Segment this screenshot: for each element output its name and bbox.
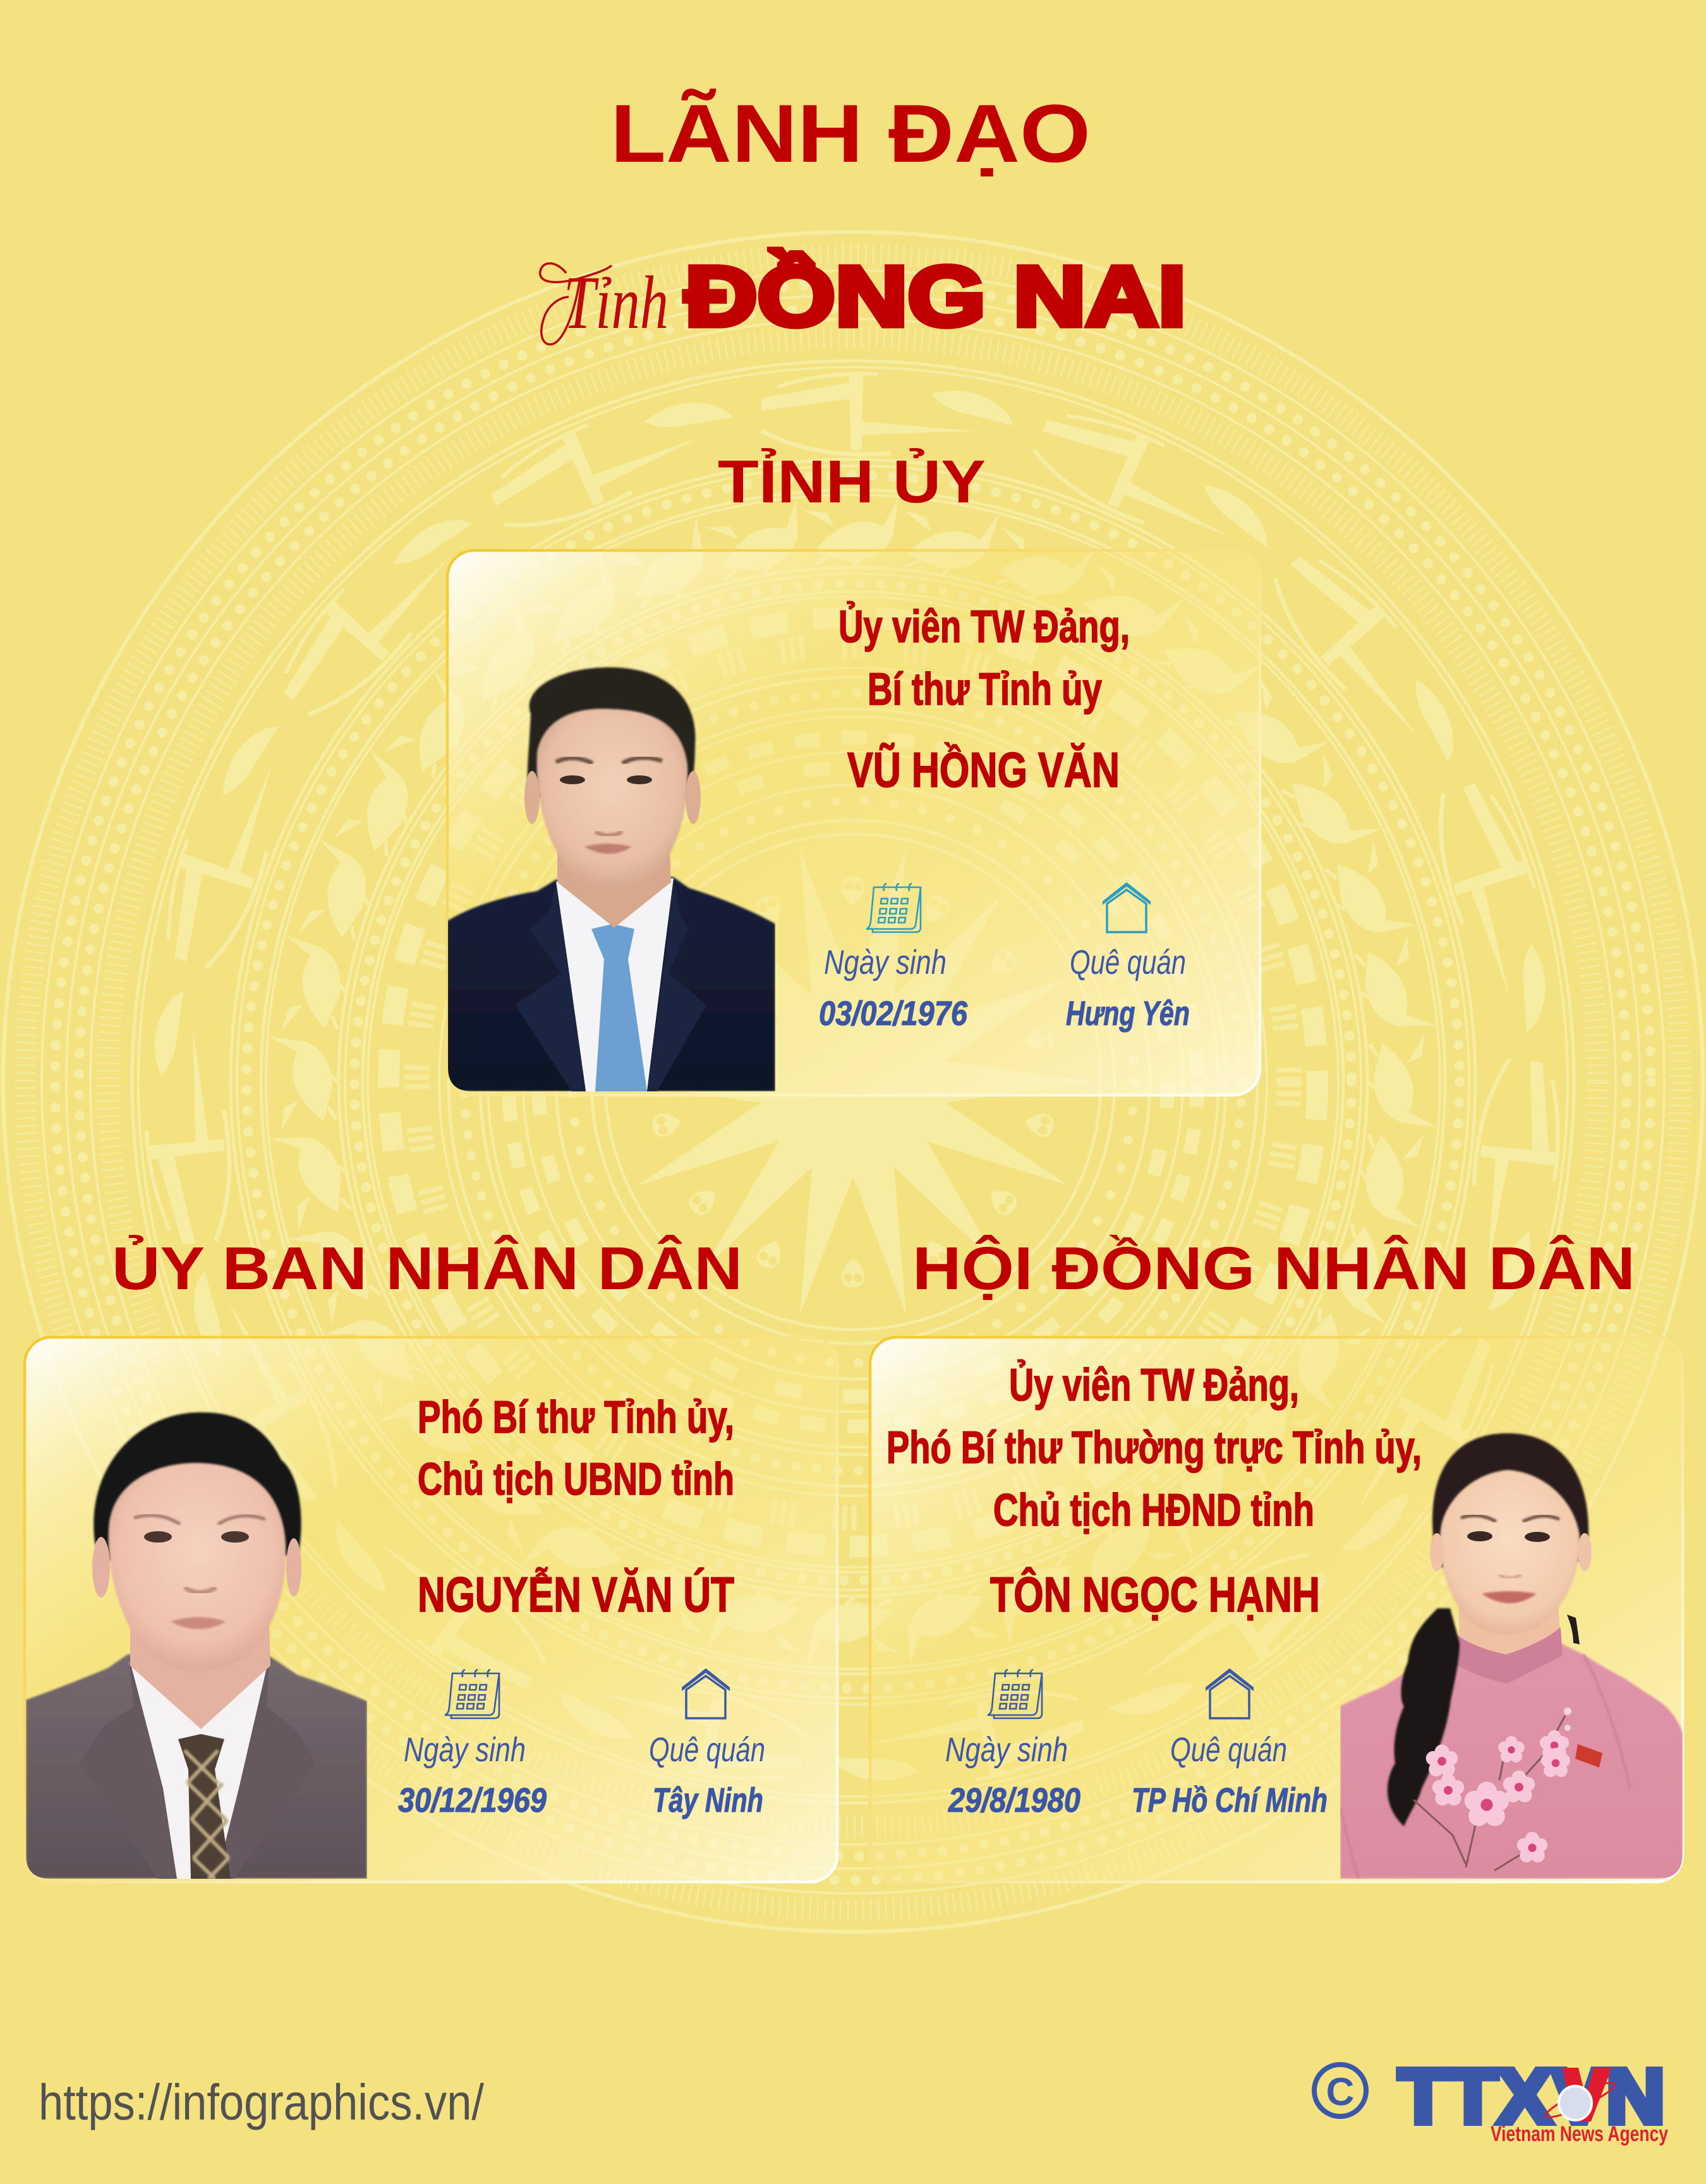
label: hometown: TP Hồ Chí Minh [1132, 1781, 1328, 1819]
label: birth date [819, 943, 968, 1033]
label: hometown: Quê quán [649, 1731, 765, 1769]
name: NGUYỄN VĂN ÚT [418, 1567, 734, 1622]
province name ĐỒNG NAI: ĐỒNG NAI [685, 249, 1186, 344]
role: Ủy viên TW Đảng, [1009, 1359, 1299, 1410]
role [886, 1359, 1422, 1536]
icon: calendar [866, 883, 921, 932]
label: birth date: 03/02/1976 [819, 995, 968, 1033]
copyright mark: C [1326, 2070, 1354, 2114]
role: Ủy viên TW Đảng, [838, 601, 1130, 652]
role: Phó Bí thư Thường trực Tỉnh ủy, [886, 1423, 1422, 1473]
title: LÃNH ĐẠO: LÃNH ĐẠO [610, 87, 1091, 179]
card background [870, 1337, 1683, 1882]
role [418, 1392, 734, 1505]
icon: house [682, 1668, 730, 1718]
icon: house [1103, 882, 1151, 932]
name: TÔN NGỌC HẠNH [990, 1567, 1320, 1622]
label: birth date: 30/12/1969 [398, 1781, 547, 1819]
subtitle: Tỉnh ĐỒNG NAI [540, 249, 1186, 344]
label: hometown: Quê quán [1170, 1731, 1287, 1769]
label: birth date: Ngày sinh [404, 1731, 526, 1769]
label: birth date [945, 1731, 1080, 1819]
label: birth date: Ngày sinh [945, 1731, 1068, 1769]
label: hometown [649, 1731, 765, 1819]
name: VŨ HỒNG VĂN [847, 742, 1120, 798]
card background [25, 1337, 837, 1882]
portrait: Vũ Hồng Văn [447, 667, 775, 1091]
panel: Tỉnh ủy card [447, 550, 1260, 1095]
script word Tỉnh: Tỉnh [564, 260, 668, 344]
logo: TTXVN: TTXVN [1398, 2053, 1665, 2139]
label: hometown: Quê quán [1070, 943, 1186, 981]
heading: ỦY BAN NHÂN DÂN: ỦY BAN NHÂN DÂN [112, 1234, 742, 1302]
background: bronze drum pattern [3, 232, 1703, 1932]
role: Bí thư Tỉnh ủy [868, 664, 1102, 715]
card background [447, 550, 1260, 1095]
panel: UBND card [25, 1337, 837, 1882]
label: birth date: 29/8/1980 [948, 1781, 1080, 1819]
label: hometown [1066, 943, 1190, 1033]
icon: house [1206, 1668, 1254, 1718]
heading: HỘI ĐỒNG NHÂN DÂN: HỘI ĐỒNG NHÂN DÂN [912, 1234, 1635, 1302]
icon: calendar [988, 1670, 1042, 1718]
label: birth date [398, 1731, 547, 1819]
script word Tỉnh [540, 260, 668, 344]
label: hometown [1132, 1731, 1328, 1819]
label: hometown: Hưng Yên [1066, 995, 1190, 1033]
copyright mark [1314, 2065, 1366, 2116]
panel: HĐND card [870, 1337, 1683, 1882]
label: hometown: Tây Ninh [653, 1781, 763, 1819]
portrait: Tôn Ngọc Hạnh [1340, 1433, 1683, 1879]
role [838, 601, 1130, 715]
role: Phó Bí thư Tỉnh ủy, [418, 1392, 734, 1443]
icon: calendar [445, 1670, 499, 1718]
label: birth date: Ngày sinh [824, 943, 947, 981]
heading: TỈNH ỦY: TỈNH ỦY [718, 447, 986, 516]
role: Chủ tịch UBND tỉnh [418, 1454, 734, 1505]
footer url: https://infographics.vn/ [39, 2074, 485, 2130]
role: Chủ tịch HĐND tỉnh [993, 1485, 1314, 1536]
portrait: Nguyễn Văn Út [26, 1412, 367, 1879]
